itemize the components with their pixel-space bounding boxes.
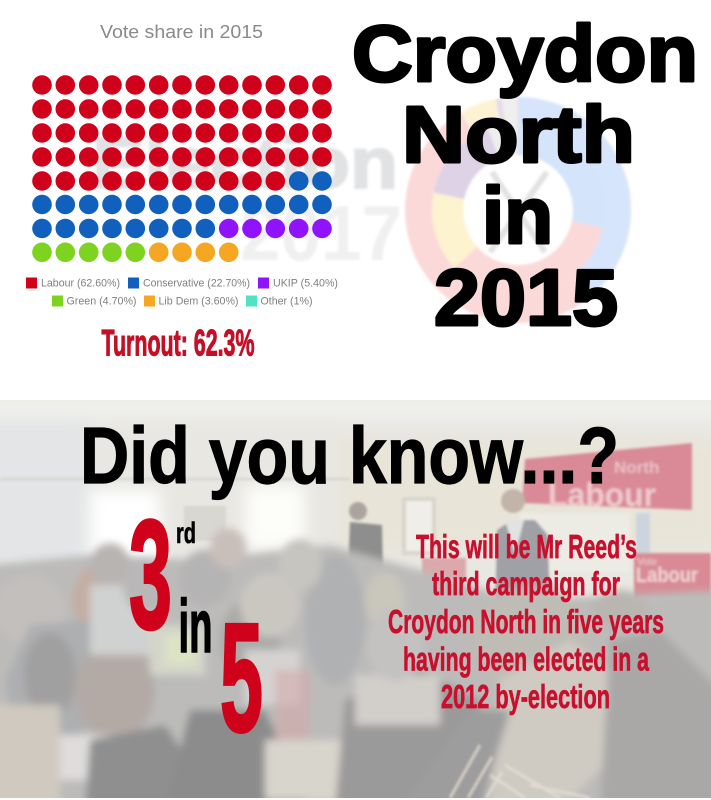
striped jumper bbox=[450, 745, 590, 798]
fact text: 2012 by-election bbox=[441, 678, 610, 715]
waffle chart: vote share dots bbox=[32, 75, 332, 262]
main title: 2015 bbox=[434, 253, 618, 342]
background photo: campaign meeting audience: Labour bbox=[636, 564, 698, 587]
crowd base bbox=[0, 545, 711, 800]
background photo: campaign meeting audience: Labour bbox=[548, 476, 656, 513]
chart title: Vote share in 2015 bbox=[100, 21, 263, 42]
chart legend: Green (4.70%) bbox=[66, 296, 136, 308]
UKIP dots bbox=[219, 219, 332, 238]
word in: in bbox=[178, 584, 212, 668]
ordinal suffix: rd bbox=[176, 517, 196, 550]
Conservative dots bbox=[32, 171, 332, 238]
chart legend bbox=[26, 278, 338, 308]
main title: in bbox=[482, 171, 553, 260]
Lib Dem dots bbox=[149, 242, 238, 262]
Labour dots bbox=[32, 75, 332, 191]
section heading: Did you know...? bbox=[80, 411, 619, 500]
turnout figure: Turnout: 62.3% bbox=[102, 322, 254, 364]
chart legend: UKIP (5.40%) bbox=[273, 278, 338, 290]
speaker bbox=[494, 518, 550, 597]
background photo: campaign meeting audience: Vote bbox=[637, 557, 657, 568]
man standing bbox=[348, 520, 384, 564]
background photo: campaign meeting audience bbox=[0, 395, 711, 800]
fact text bbox=[388, 528, 664, 715]
main title bbox=[352, 9, 698, 342]
background photo: campaign meeting audience: North bbox=[614, 458, 659, 477]
main title: North bbox=[402, 90, 635, 179]
background watermark: Election 2017 logo bbox=[92, 110, 618, 310]
stat: 3rd in 5: 3 bbox=[129, 488, 172, 661]
Green dots bbox=[32, 242, 145, 262]
stat: 3rd in 5 bbox=[129, 488, 263, 764]
main title: Croydon bbox=[352, 9, 698, 98]
background watermark: Election 2017 logo: 2017 bbox=[240, 189, 402, 277]
chart legend: Other (1%) bbox=[260, 296, 312, 308]
chart legend: Labour (62.60%) bbox=[41, 278, 120, 290]
chart legend: Conservative (22.70%) bbox=[143, 278, 250, 290]
chart legend: Lib Dem (3.60%) bbox=[158, 296, 238, 308]
banner bbox=[522, 443, 692, 510]
infographic canvas: 5 bbox=[220, 591, 263, 764]
background watermark: Election 2017 logo: Election bbox=[92, 124, 398, 204]
